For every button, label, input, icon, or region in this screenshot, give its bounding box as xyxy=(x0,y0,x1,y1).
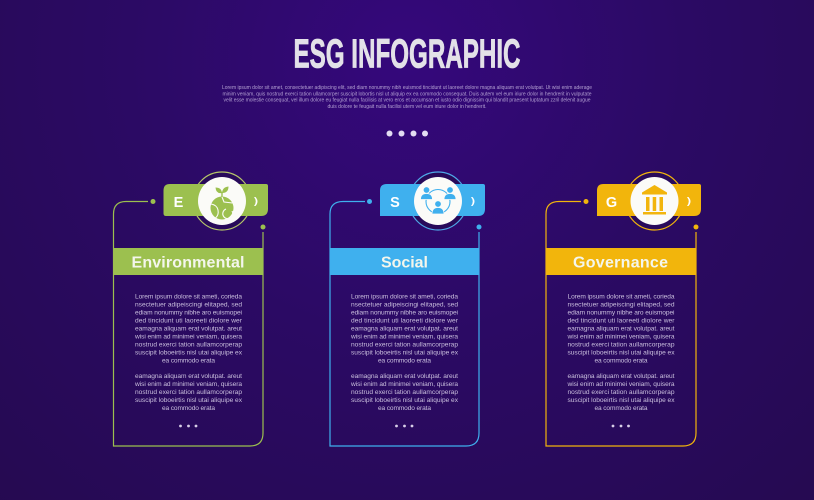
tab xyxy=(597,184,701,216)
body text: wisi enim ad minimei veniam, quisera xyxy=(566,334,675,340)
body text: wisi enim ad minimei veniam, quisera xyxy=(350,334,458,340)
body text: nsectetuer adipeiscingi elitaped, sed xyxy=(135,302,242,308)
card outline xyxy=(330,202,479,446)
body text: ea commodo erata xyxy=(378,358,431,364)
icon: institution building xyxy=(630,177,678,225)
icon ring xyxy=(193,172,251,230)
body text: Lorem ipsum dolore sit ameti, corieda xyxy=(135,294,242,300)
tab letter: G xyxy=(606,195,617,211)
title: ESG INFOGRAPHIC xyxy=(294,30,520,76)
body text: ediam nonummy nibhe aro euismopei xyxy=(568,310,675,316)
body text: ediam nonummy nibhe aro euismopei xyxy=(135,310,243,316)
body text: ea commodo erata xyxy=(162,405,215,412)
body text: wisi enim ad minimei veniam, quisera xyxy=(134,381,242,388)
intro text xyxy=(222,85,592,110)
body text: nostrud exerci tation aullamcorperap xyxy=(568,342,675,348)
band xyxy=(330,248,479,275)
body text: nostrud exerci tation aullamcorperap xyxy=(568,389,675,396)
tab chevron xyxy=(687,197,690,206)
body text: nostrud exerci tation aullamcorperap xyxy=(135,389,242,396)
tab letter: E xyxy=(174,195,184,211)
body text: ded tincidunt uti laoreeti diolore wer xyxy=(351,318,459,324)
body text: suscipit loboeirtis nisl utai aliquipe ex xyxy=(135,397,243,404)
body text: ea commodo erata xyxy=(594,358,648,364)
connector dots xyxy=(367,199,482,230)
band title: Governance xyxy=(573,254,668,272)
body text: nostrud exerci tation aullamcorperap xyxy=(135,342,242,348)
more dots xyxy=(612,425,630,427)
body text: Lorem ipsum dolore sit ameti, corieda xyxy=(568,294,675,300)
more dots xyxy=(395,425,413,427)
body text: eamagna aliquam erat volutpat. areut xyxy=(351,373,458,380)
panel: environmental xyxy=(113,172,268,446)
body text: ea commodo erata xyxy=(162,358,215,364)
body text: ea commodo erata xyxy=(378,405,431,412)
icon: people network xyxy=(414,177,462,225)
tab chevron xyxy=(254,197,258,206)
connector dots xyxy=(150,199,266,230)
tab letter: S xyxy=(390,195,400,211)
body text: ediam nonummy nibhe aro euismopei xyxy=(351,310,459,316)
body text: eamagna aliquam erat volutpat. areut xyxy=(568,373,675,380)
body text: eamagna aliquam erat volutpat. areut xyxy=(351,326,458,332)
body text xyxy=(134,294,243,412)
band title: Social xyxy=(381,254,428,272)
body text: eamagna aliquam erat volutpat. areut xyxy=(568,326,675,332)
icon: globe sprout xyxy=(198,177,246,225)
body text: eamagna aliquam erat volutpat. areut xyxy=(135,373,242,380)
body text: suscipit loboeirtis nisl utai aliquipe ex xyxy=(568,350,675,356)
body text: suscipit loboeirtis nisl utai aliquipe ex xyxy=(351,397,459,404)
body text: ded tincidunt uti laoreeti diolore wer xyxy=(568,318,675,324)
card outline xyxy=(546,202,696,446)
card outline xyxy=(114,202,263,446)
body text: nostrud exerci tation aullamcorperap xyxy=(351,342,458,348)
pagination dots xyxy=(386,130,428,136)
body text xyxy=(566,294,675,412)
body text: nsectetuer adipeiscingi elitaped, sed xyxy=(351,302,458,308)
body text: ded tincidunt uti laoreeti diolore wer xyxy=(135,318,243,324)
body text: suscipit loboeirtis nisl utai aliquipe ex xyxy=(351,350,459,356)
band title: Environmental xyxy=(132,254,244,272)
tab xyxy=(380,184,485,216)
band xyxy=(546,248,696,275)
body text: wisi enim ad minimei veniam, quisera xyxy=(350,381,458,388)
panel: social xyxy=(330,172,485,446)
body text: Lorem ipsum dolore sit ameti, corieda xyxy=(351,294,458,300)
body text: nostrud exerci tation aullamcorperap xyxy=(351,389,458,396)
tab xyxy=(164,184,268,216)
connector dots xyxy=(584,199,698,230)
more dots xyxy=(179,425,197,427)
intro text: minim veniam, quis nostrud exerci tation ullamcorper suscipit lobortis nisl ut aliquip ex ea commodo consequat. Duis autem vel eum iriure dolor in hendrerit in vulputate xyxy=(222,91,592,97)
body text xyxy=(350,294,459,412)
intro text: velit esse molestie consequat, vel illum dolore eu feugiat nulla facilisis at vero eros et accumsan et iusto odio dignissim qui blandit praesent luptatum zzril delenit augue xyxy=(224,98,591,104)
body text: wisi enim ad minimei veniam, quisera xyxy=(134,334,242,340)
tab chevron xyxy=(471,197,474,206)
body text: ea commodo erata xyxy=(594,405,648,412)
intro text: duis dolore te feugait nulla facilisi utem vel eum iriure dolor in hendrerit. xyxy=(328,104,486,110)
body text: wisi enim ad minimei veniam, quisera xyxy=(566,381,675,388)
intro text: Lorem ipsum dolor sit amet, consectetuer adipiscing elit, sed diam nonummy nibh euismod tincidunt ut laoreet dolore magna aliquam erat volutpat. Ut wisi enim aderage xyxy=(222,85,592,91)
body text: suscipit loboeirtis nisl utai aliquipe ex xyxy=(135,350,243,356)
body text: nsectetuer adipeiscingi elitaped, sed xyxy=(568,302,675,308)
icon ring xyxy=(409,172,467,230)
body text: eamagna aliquam erat volutpat. areut xyxy=(135,326,242,332)
band xyxy=(113,248,263,275)
icon ring xyxy=(626,172,684,230)
body text: suscipit loboeirtis nisl utai aliquipe ex xyxy=(568,397,675,404)
panel: governance xyxy=(546,172,701,446)
